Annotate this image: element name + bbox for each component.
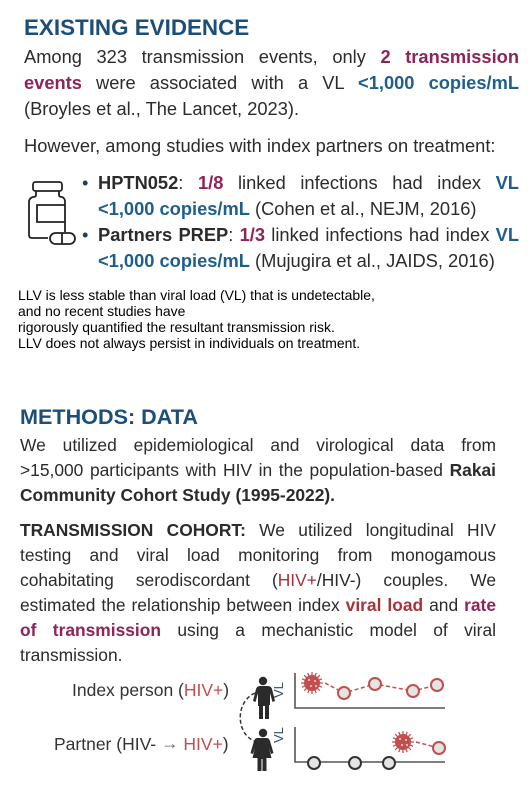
text block: transmission events [24,46,519,119]
text block: LLV note: LLV is less stable than viral load (VL) that is undetectable, [18,287,375,303]
text block: transmission cohort [20,520,496,665]
arrow: transmission link [240,693,255,741]
icon: pill bottle [28,181,76,245]
text block: LLV note [18,287,375,351]
chart: index viral load [295,672,445,708]
heading: existing evidence: EXISTING EVIDENCE [24,15,249,40]
text block: transmission cohort: cohabitating serodiscordant (HIV+/HIV-) couples. We [20,570,496,590]
axis label: VL: VL [271,727,286,743]
list: linked infection studies: <1,000 copies/mL (Mujugira et al., JAIDS, 2016) [98,250,495,271]
list: linked infection studies: <1,000 copies/mL (Cohen et al., NEJM, 2016) [98,198,477,219]
text block: data sources: We utilized epidemiological and virological data from [20,435,496,455]
text block: data sources [20,435,496,505]
label: partner: Partner (HIV- → HIV+) [54,733,229,754]
icon: index person [253,677,275,719]
text block: transmission cohort: TRANSMISSION COHORT: We utilized longitudinal HIV [20,520,496,540]
list: linked infection studies: HPTN052: 1/8 linked infections had index VL [98,172,519,193]
text block: transmission events: (Broyles et al., The Lancet, 2023). [24,98,299,119]
label: index person: Index person (HIV+) [72,680,229,700]
text block: transmission events: events were associated with a VL <1,000 copies/mL [24,72,519,93]
text block: LLV note: LLV does not always persist in individuals on treatment. [18,335,360,351]
heading: methods data: METHODS: DATA [20,404,198,429]
text block: transmission cohort: transmission. [20,645,122,665]
diagram: transmission timelines [240,672,446,771]
text block: data sources: Community Cohort Study (1995-2022). [20,485,335,505]
chart: partner viral load [295,727,445,769]
text block: transmission cohort: of transmission using a mechanistic model of viral [20,620,496,640]
text block: LLV note: rigorously quantified the resultant transmission risk. [18,319,335,335]
list: linked infection studies [82,172,519,271]
list: linked infection studies: • [82,172,88,193]
text block: transmission events: Among 323 transmission events, only 2 transmission [24,46,519,67]
list: linked infection studies: Partners PREP: 1/3 linked infections had index VL [98,224,519,245]
list: linked infection studies: • [82,224,88,245]
icon: partner person [250,729,274,771]
text block: transmission cohort: estimated the relationship between index viral load and rate [20,595,496,615]
text block: LLV note: and no recent studies have [18,303,185,319]
text block: data sources: >15,000 participants with HIV in the population-based Rakai [20,460,496,480]
text block: transmission cohort: testing and viral load monitoring from monogamous [20,545,496,565]
axis label: VL: VL [271,682,286,698]
text block: studies on treatment: However, among studies with index partners on treatment: [24,135,496,156]
